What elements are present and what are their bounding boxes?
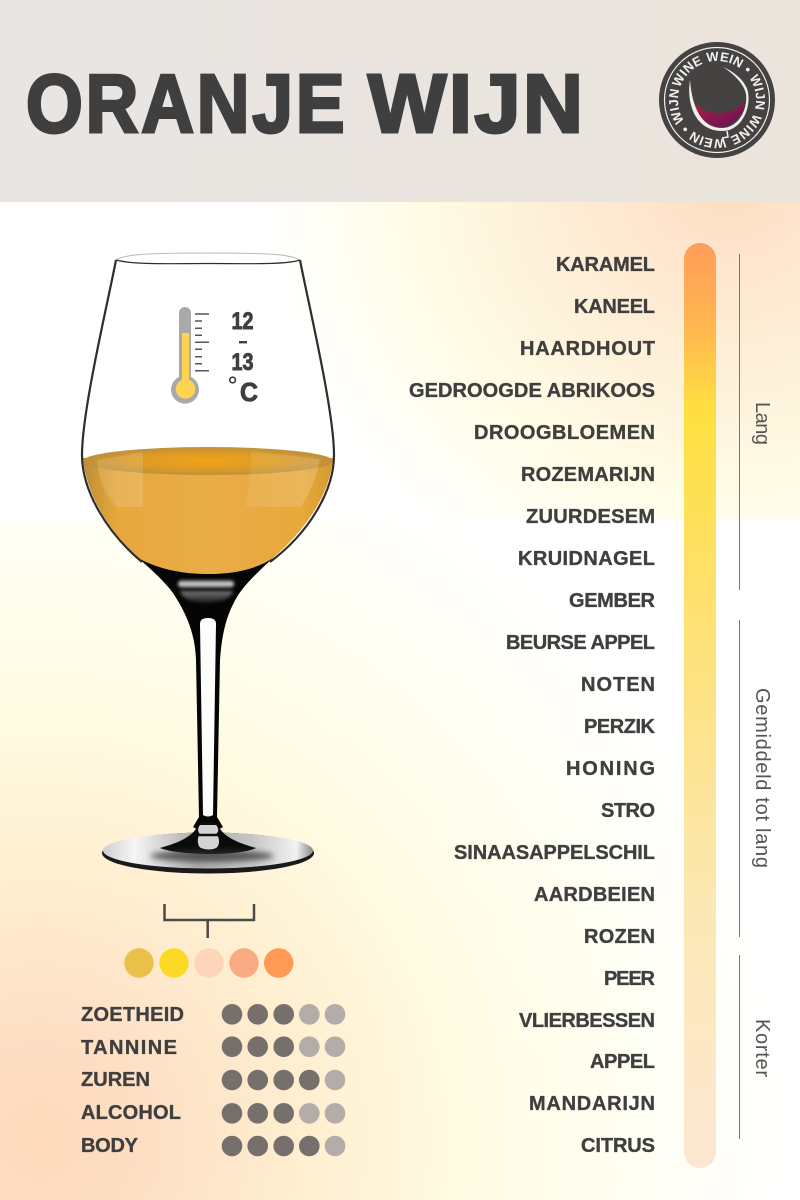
aroma list: CITRUS xyxy=(581,1135,655,1157)
aroma list xyxy=(409,254,656,1157)
title xyxy=(26,57,583,150)
thermometer xyxy=(171,307,209,404)
logo ring text: WINE WEIN • WIJN WINE WEIN • WIJN xyxy=(669,52,765,148)
aroma list: PERZIK xyxy=(584,716,656,738)
aroma list: STRO xyxy=(601,800,655,822)
wine glass xyxy=(82,253,334,874)
aroma list: HAARDHOUT xyxy=(520,338,655,360)
intensity bar xyxy=(684,243,716,1168)
taste labels: BODY xyxy=(81,1135,139,1157)
logo badge xyxy=(659,42,775,158)
glass neck and stem xyxy=(138,558,273,832)
taste labels: ZUREN xyxy=(81,1069,150,1091)
aroma list: GEDROOGDE ABRIKOOS xyxy=(409,380,655,402)
temperature text xyxy=(230,308,258,407)
aroma list: KRUIDNAGEL xyxy=(518,548,655,570)
taste labels xyxy=(81,1004,184,1157)
temperature text: 13 xyxy=(232,349,254,376)
taste profile xyxy=(81,1004,345,1157)
title: WIJN xyxy=(368,57,583,150)
bracket xyxy=(164,904,254,938)
aroma list: VLIERBESSEN xyxy=(519,1010,655,1032)
aroma list: DROOGBLOEMEN xyxy=(474,422,655,444)
aroma list: BEURSE APPEL xyxy=(506,632,655,654)
glass foot xyxy=(102,822,314,874)
taste labels: ALCOHOL xyxy=(81,1102,181,1124)
taste labels: TANNINE xyxy=(81,1037,177,1059)
logo glass xyxy=(689,67,749,138)
aroma list: KANEEL xyxy=(574,296,655,318)
label: lang: Lang xyxy=(751,402,773,445)
finish length scale xyxy=(740,254,773,1139)
aroma list: HONING xyxy=(566,758,655,780)
glass bowl outline xyxy=(82,253,334,562)
aroma list: PEER xyxy=(604,968,656,990)
aroma list: SINAASAPPELSCHIL xyxy=(454,842,655,864)
taste labels: ZOETHEID xyxy=(81,1004,184,1026)
temperature text: 12 xyxy=(232,308,254,335)
aroma list: KARAMEL xyxy=(556,254,655,276)
taste dots xyxy=(222,1004,345,1156)
aroma list: ROZEN xyxy=(584,926,655,948)
header band xyxy=(0,0,800,202)
aroma list: ROZEMARIJN xyxy=(521,464,655,486)
temperature text: C xyxy=(240,377,258,407)
aroma list: NOTEN xyxy=(581,674,655,696)
aroma list: MANDARIJN xyxy=(529,1093,655,1115)
title: ORANJE xyxy=(26,57,345,150)
aroma list: ZUURDESEM xyxy=(526,506,655,528)
aroma list: APPEL xyxy=(590,1051,655,1073)
label: korter: Korter xyxy=(751,1019,773,1077)
colour swatches xyxy=(124,948,293,978)
aroma list: GEMBER xyxy=(569,590,656,612)
label: gemiddeld tot lang: Gemiddeld tot lang xyxy=(751,688,773,868)
glass liquid xyxy=(83,447,333,574)
aroma list: AARDBEIEN xyxy=(534,884,655,906)
